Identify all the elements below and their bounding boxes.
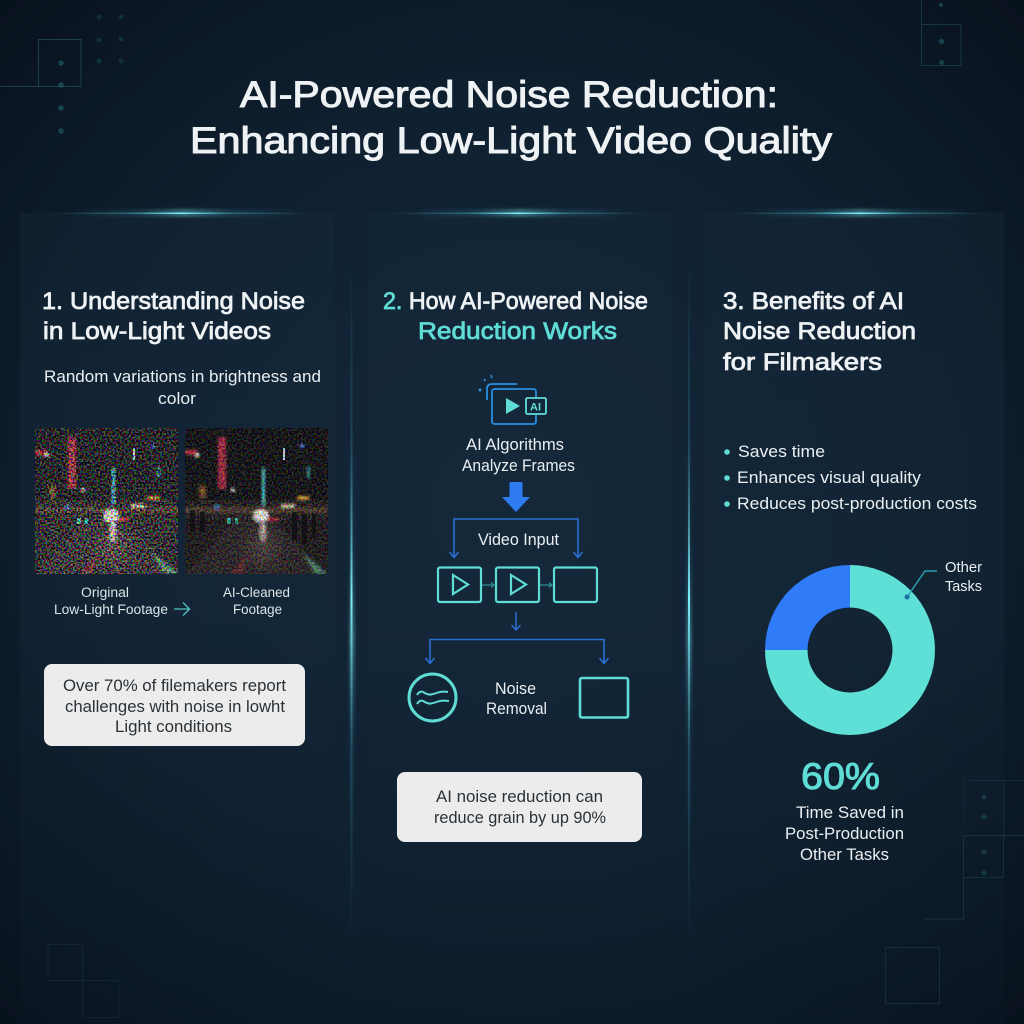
vertical glowing divider right bbox=[686, 260, 692, 940]
callout: grain reduction: AI noise reduction can bbox=[436, 787, 603, 806]
frame box with play 2 bbox=[496, 568, 539, 602]
stat description: Other Tasks bbox=[800, 845, 889, 864]
panel: benefits bbox=[705, 209, 1004, 1024]
arrow: small down bbox=[512, 612, 520, 630]
panel 3 heading: Noise Reduction bbox=[723, 318, 916, 345]
title: Enhancing Low-Light Video Quality bbox=[190, 120, 833, 161]
stat: 60%: 60% bbox=[801, 756, 880, 797]
callout: grain reduction bbox=[397, 772, 642, 842]
donut chart bbox=[765, 565, 935, 735]
text: AI algorithms analyze frames: AI Algorithms bbox=[466, 435, 564, 454]
benefits list bbox=[724, 442, 977, 513]
panel 2 background bbox=[369, 213, 671, 1024]
panel 3 background bbox=[705, 213, 1004, 1024]
panel 1 description: Random variations in brightness and bbox=[44, 367, 321, 386]
panel 1 top glow bbox=[50, 209, 310, 217]
photo: original noisy footage bbox=[35, 428, 178, 574]
benefits list: Reduces post-production costs bbox=[737, 494, 977, 513]
panel 2 heading bbox=[383, 288, 648, 345]
label: cleaned footage: Footage bbox=[233, 602, 282, 617]
text: AI algorithms analyze frames bbox=[462, 435, 575, 475]
decoration: top-left circuit squares bbox=[0, 14, 124, 134]
panel 1 heading bbox=[42, 288, 305, 345]
panel 2 heading: 2. How AI-Powered Noise bbox=[383, 288, 648, 315]
icon: noise waves circle bbox=[409, 674, 456, 721]
panel 2 heading: Reduction Works bbox=[418, 318, 617, 345]
panel 3 top glow bbox=[730, 209, 990, 217]
frame box with play 1 bbox=[438, 568, 481, 602]
label: original footage: Low-Light Footage bbox=[54, 602, 168, 617]
benefits list: Enhances visual quality bbox=[737, 468, 922, 487]
arrow: frame 2 to 3 bbox=[540, 582, 552, 588]
benefits list: Saves time bbox=[738, 442, 825, 461]
callout: 70% of filmmakers bbox=[44, 664, 305, 746]
decoration: bottom-left circuit squares bbox=[48, 944, 118, 1018]
title: AI-Powered Noise Reduction: bbox=[240, 74, 778, 115]
connector: top bracket bbox=[450, 519, 582, 558]
panel 2 top glow bbox=[390, 209, 646, 217]
decoration: top-right circuit square bbox=[922, 0, 961, 66]
label: noise removal: Noise bbox=[495, 679, 536, 698]
arrow: frame 1 to 2 bbox=[482, 582, 494, 588]
callout line: other tasks bbox=[904, 571, 937, 600]
icon: AI video frames: AI bbox=[530, 402, 541, 414]
panel 3 heading: 3. Benefits of AI bbox=[723, 288, 904, 315]
panel 1 heading: 1. Understanding Noise bbox=[42, 288, 305, 315]
label: noise removal: Removal bbox=[486, 699, 547, 718]
output frame box bbox=[580, 678, 628, 718]
label: noise removal bbox=[486, 679, 547, 718]
title bbox=[190, 74, 833, 161]
panel 3 heading bbox=[723, 288, 916, 376]
connector: lower bracket bbox=[426, 640, 608, 664]
arrow: original to cleaned bbox=[174, 602, 190, 616]
decoration: bottom-right circuit squares bbox=[886, 780, 1024, 1004]
callout: 70% of filmmakers: challenges with noise in lowht bbox=[65, 697, 285, 716]
label: video input: Video Input bbox=[478, 530, 559, 549]
panel 3 heading: for Filmakers bbox=[723, 349, 882, 376]
panel 1 background bbox=[20, 213, 334, 1024]
text: AI algorithms analyze frames: Analyze Frames bbox=[462, 456, 575, 475]
photo: AI-cleaned footage bbox=[185, 428, 328, 574]
stat description: Post-Production bbox=[785, 824, 904, 843]
panel: understanding noise bbox=[35, 208, 328, 746]
arrow: big blue down arrow bbox=[502, 482, 530, 512]
label: original footage: Original bbox=[81, 585, 129, 600]
label: cleaned footage: AI-Cleaned bbox=[223, 585, 290, 600]
label: other tasks bbox=[945, 560, 982, 595]
panel 1 heading: in Low-Light Videos bbox=[43, 318, 271, 345]
callout: grain reduction: reduce grain by up 90% bbox=[434, 808, 606, 827]
panel 1 description bbox=[44, 367, 321, 408]
label: other tasks: Other bbox=[945, 560, 982, 576]
vertical glowing divider left bbox=[349, 260, 355, 940]
stat description bbox=[785, 803, 904, 864]
panel: how it works bbox=[369, 209, 671, 1024]
label: cleaned footage bbox=[223, 585, 290, 617]
panel 1 description: color bbox=[158, 389, 196, 408]
callout: 70% of filmmakers: Light conditions bbox=[115, 717, 232, 736]
frame box empty bbox=[554, 568, 597, 602]
label: original footage bbox=[54, 585, 168, 617]
stat description: Time Saved in bbox=[796, 803, 904, 822]
callout: 70% of filmmakers: Over 70% of filemakers report bbox=[63, 676, 286, 695]
label: other tasks: Tasks bbox=[945, 579, 982, 595]
icon: AI video frames bbox=[478, 375, 546, 424]
